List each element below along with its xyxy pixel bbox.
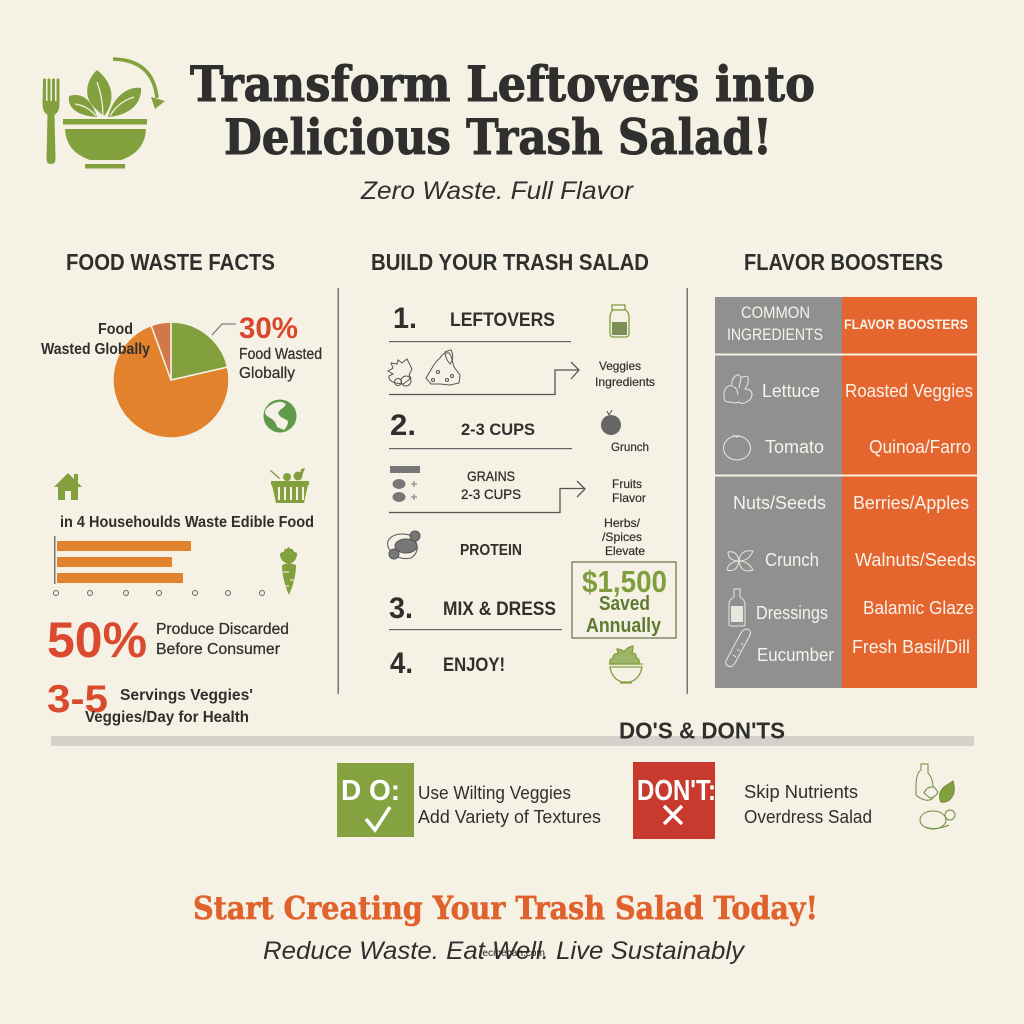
- step grains: [461, 469, 521, 502]
- do list: Use Wilting Veggies: [418, 783, 571, 803]
- arrow: leftovers to veggies: [389, 362, 579, 394]
- panel: flavor boosters: [715, 249, 977, 688]
- panel: food waste facts: [41, 249, 322, 726]
- icon: basket: [270, 468, 309, 503]
- step 3 mix and dress: 3.: [389, 592, 413, 625]
- icon: carrot: [280, 547, 297, 595]
- label: fruits flavor: [612, 477, 646, 505]
- row: dressings: [756, 598, 974, 623]
- step 4 enjoy: 4.: [390, 647, 413, 680]
- row: tomato: Tomato: [765, 437, 824, 457]
- step 2 cups: [389, 409, 572, 449]
- don't list: Overdress Salad: [744, 807, 872, 827]
- step 1 leftovers: [389, 302, 571, 342]
- step 1 leftovers: 1.: [393, 302, 417, 335]
- stat: 30 percent: Globally: [239, 365, 295, 382]
- row: lettuce: Roasted Veggies: [845, 381, 973, 401]
- icon: protein bowl: [388, 531, 420, 559]
- stat: 30 percent: [239, 312, 322, 382]
- tagline: Reduce Waste. Eat Well. Live Sustainably: [263, 937, 746, 965]
- step 2 cups: 2-3 CUPS: [461, 420, 535, 439]
- row: cucumber: Eucumber: [757, 645, 834, 665]
- row: crunch: [765, 550, 976, 570]
- label: herbs spices: /Spices: [602, 530, 642, 544]
- panel: do's and don'ts: [337, 718, 955, 839]
- stat: 3-5 servings: 3-5: [47, 678, 108, 721]
- stat: 50 percent: Produce Discarded: [156, 621, 289, 638]
- title: [190, 55, 815, 166]
- pie label left: Food: [98, 321, 133, 338]
- icon: globe: [264, 400, 296, 432]
- step 4 enjoy: [390, 647, 505, 680]
- subtitle: Zero Waste. Full Flavor: [360, 177, 635, 205]
- don't list: [744, 782, 872, 827]
- label: veggies ingredients: [595, 359, 655, 389]
- row: lettuce: Lettuce: [762, 381, 820, 401]
- do list: Add Variety of Textures: [418, 807, 601, 827]
- row: tomato: Quinoa/Farro: [869, 437, 971, 457]
- table header: COMMON: [741, 304, 810, 322]
- icon: jar: [610, 305, 629, 337]
- icon: salad bowl outline: [609, 646, 643, 683]
- arrow: grains to fruits: [389, 481, 585, 512]
- pie label left: Wasted Globally: [41, 341, 150, 358]
- call to action: Start Creating Your Trash Salad Today!: [193, 889, 818, 927]
- step 3 mix and dress: [389, 592, 562, 630]
- stat: 50 percent: Before Consumer: [156, 641, 280, 658]
- icon: house: [54, 473, 82, 500]
- icon: vegetables and cheese line art: [388, 350, 460, 386]
- heading: food waste facts: FOOD WASTE FACTS: [66, 249, 275, 275]
- text: households stat: in 4 Househoulds Waste Edible Food: [60, 514, 314, 531]
- row: tomato: [765, 437, 971, 457]
- label: herbs spices: [602, 516, 645, 558]
- label: herbs spices: Elevate: [605, 544, 645, 558]
- step 3 mix and dress: MIX & DRESS: [443, 599, 556, 620]
- icon: bottle and vegetables: [916, 764, 955, 829]
- table background: [715, 297, 977, 688]
- stat: 30 percent: Food Wasted: [239, 346, 322, 363]
- row: cucumber: Fresh Basil/Dill: [852, 637, 970, 657]
- label: grunch: Grunch: [611, 440, 649, 454]
- step 2 cups: 2.: [390, 409, 416, 442]
- label: herbs spices: Herbs/: [604, 516, 641, 530]
- do box: D O:: [341, 775, 400, 807]
- stat: 3-5 servings: [47, 678, 253, 726]
- heading: flavor boosters: FLAVOR BOOSTERS: [744, 249, 943, 275]
- row: nuts and seeds: Berries/Apples: [853, 493, 969, 513]
- row: nuts and seeds: Nuts/Seeds: [733, 493, 826, 513]
- don't box: DON'T:: [637, 775, 716, 807]
- heading: build your trash salad: BUILD YOUR TRASH SALAD: [371, 249, 649, 275]
- stat: 30 percent: 30%: [239, 312, 298, 345]
- table header: INGREDIENTS: [727, 326, 823, 344]
- table header: [727, 304, 968, 344]
- icon: grains: [390, 466, 420, 502]
- do list: [418, 783, 601, 827]
- do box: [337, 763, 414, 837]
- watermark: recipecan.com: [479, 947, 545, 959]
- row: crunch: Walnuts/Seeds: [855, 550, 976, 570]
- row: crunch: Crunch: [765, 550, 819, 570]
- pie leader line: [212, 324, 236, 335]
- row: cucumber: [757, 637, 970, 665]
- step grains: GRAINS: [467, 469, 515, 484]
- heading: do's and don'ts: DO'S & DON'TS: [619, 718, 785, 744]
- stat: 3-5 servings: Servings Veggies': [120, 687, 253, 704]
- step 1 leftovers: LEFTOVERS: [450, 310, 555, 331]
- row: lettuce: [762, 381, 973, 401]
- callout: savings: Annually: [586, 615, 662, 637]
- title: Transform Leftovers into: [190, 55, 815, 113]
- don't list: Skip Nutrients: [744, 782, 858, 802]
- icon: basil leaves: [727, 551, 753, 571]
- row: nuts and seeds: [733, 493, 969, 513]
- bar chart: [54, 536, 264, 596]
- callout: savings: $1,500: [582, 564, 667, 599]
- logo icon: salad bowl and fork: [42, 59, 165, 168]
- icon: lettuce: [724, 375, 752, 404]
- step protein: PROTEIN: [460, 542, 522, 559]
- title: Delicious Trash Salad!: [224, 108, 772, 166]
- callout: savings: Saved: [599, 593, 650, 615]
- label: fruits flavor: Flavor: [612, 491, 646, 505]
- icon: cucumber: [726, 629, 750, 667]
- pie chart: [113, 322, 229, 438]
- stat: 3-5 servings: Veggies/Day for Health: [85, 709, 249, 726]
- callout: savings: [572, 562, 676, 638]
- row: dressings: Dressings: [756, 603, 828, 623]
- pie label left: [41, 321, 150, 358]
- row: dressings: Balamic Glaze: [863, 598, 974, 618]
- icon: fruit: [601, 410, 621, 435]
- step 4 enjoy: ENJOY!: [443, 655, 505, 676]
- table header: FLAVOR BOOSTERS: [844, 317, 968, 332]
- stat: 50 percent: 50%: [47, 612, 147, 668]
- label: veggies ingredients: Veggies: [599, 359, 641, 373]
- stat: 50 percent: [47, 612, 289, 668]
- panel: build your trash salad: [371, 249, 676, 683]
- icon: tomato: [724, 435, 750, 460]
- don't box: [633, 762, 716, 839]
- step grains: 2-3 CUPS: [461, 487, 521, 502]
- icon: dressing bottle: [729, 589, 745, 626]
- label: fruits flavor: Fruits: [612, 477, 642, 491]
- label: veggies ingredients: Ingredients: [595, 375, 655, 389]
